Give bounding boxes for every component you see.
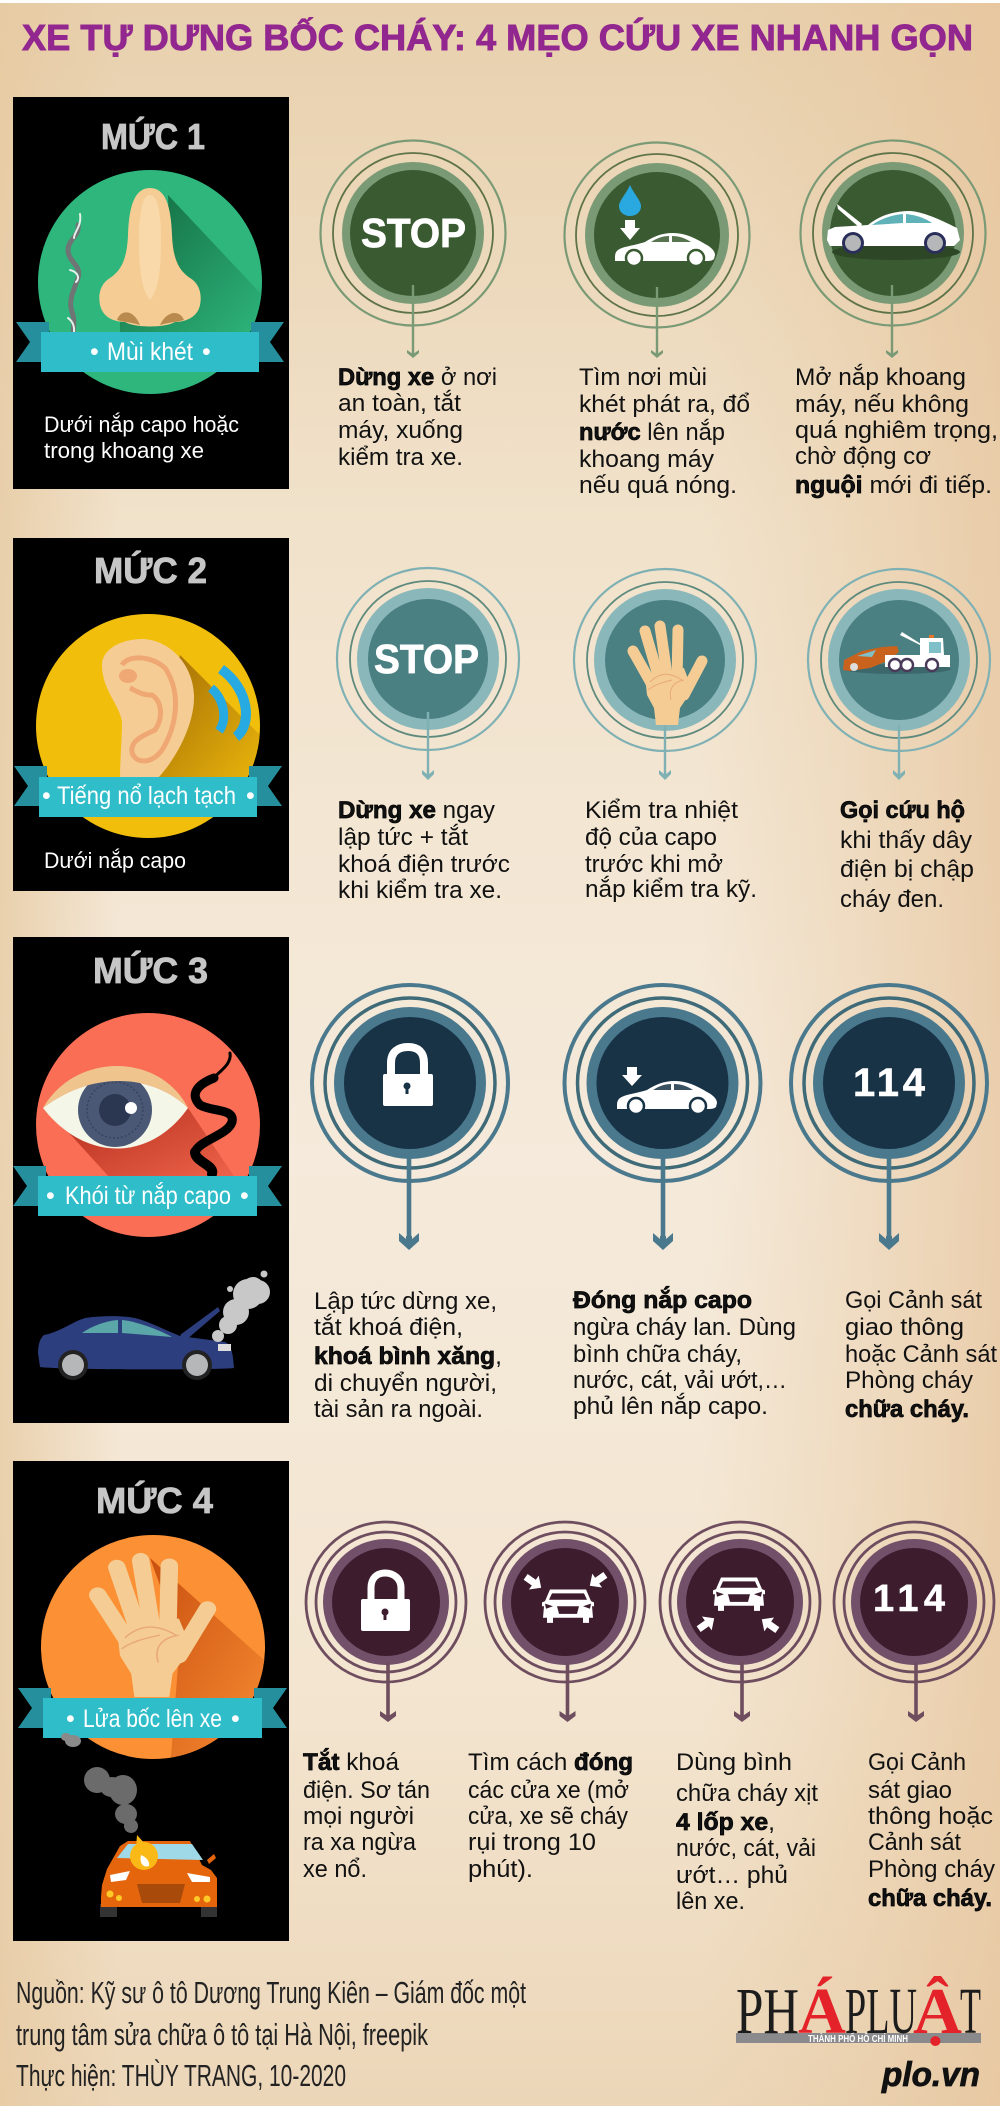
panel: level 3: [13, 937, 289, 1423]
step: L2 tow truck: [808, 569, 990, 780]
text: L4 step 4: thông hoặc: [868, 1803, 993, 1830]
arrow: [560, 1662, 576, 1722]
text: L4 step 4: Gọi Cảnh: [868, 1749, 966, 1776]
text: L1 step 2: Tìm nơi mùi: [579, 364, 707, 391]
text: L4 step 4: Cảnh sát: [868, 1829, 961, 1856]
text: L4 step 2: [468, 1749, 633, 1883]
text: L4 step 1: điện. Sơ tán: [303, 1777, 430, 1804]
text: L1 step 2: nếu quá nóng.: [579, 472, 737, 499]
heading: level 1: MỨC 1: [101, 115, 205, 157]
icon: car: [617, 1081, 717, 1114]
arrow: [422, 712, 434, 780]
text: L2 step 1: Dừng xe ngay: [338, 797, 495, 824]
icon: 114: 114: [853, 1061, 926, 1105]
text: L4 step 4: [868, 1749, 995, 1912]
step: L3 call 114: [791, 985, 987, 1250]
panel: level 2: [13, 538, 289, 891]
icon: car front with tyre arrows: [694, 1578, 782, 1637]
text: L2 step 3: điện bị chập: [840, 856, 974, 883]
text: L1 step 3: [795, 364, 998, 499]
arrow: [886, 285, 898, 358]
text: L1 step 1: an toàn, tắt: [338, 390, 461, 417]
arrow: [653, 1158, 673, 1250]
text: L3 step 3: Gọi Cảnh sát: [845, 1287, 982, 1314]
text: L1 step 2: khét phát ra, đổ: [579, 391, 750, 418]
icon: smoking blue car: [38, 1270, 270, 1380]
footer: source and credits: [16, 1975, 526, 2093]
text: L4 step 1: [303, 1748, 430, 1883]
text: L4 step 2: Tìm cách đóng: [468, 1749, 633, 1776]
text: L1 step 1: [338, 364, 497, 471]
text: L2 step 3: khi thấy dây: [840, 827, 972, 854]
step: L2 stop: [337, 568, 519, 780]
heading: level 2: MỨC 2: [94, 549, 207, 591]
text: L4 step 2: các cửa xe (mở: [468, 1777, 629, 1804]
arrow: [380, 1662, 396, 1722]
text: L4 step 3: 4 lốp xe,: [676, 1809, 775, 1836]
step: L1 stop: [320, 140, 506, 358]
arrow: [659, 725, 671, 780]
step: L3 close hood: [564, 985, 760, 1250]
orange circle: [41, 1535, 265, 1759]
step: L4 spray tyres: [660, 1522, 820, 1722]
text: L3 step 3: Phòng cháy: [845, 1367, 973, 1394]
text: L3 step 3: giao thông: [845, 1314, 964, 1341]
text: L4 step 1: Tắt khoá: [303, 1748, 400, 1776]
icon: ear: [102, 639, 260, 777]
text: L4 step 3: [676, 1749, 818, 1915]
step: L2 hand: [574, 569, 756, 780]
green circle: [38, 170, 262, 394]
ribbon: Khói từ nắp capo: Khói từ nắp capo: [65, 1181, 231, 1210]
text: L4 step 1: ra xa ngừa: [303, 1829, 417, 1856]
text: L4 step 1: mọi người: [303, 1803, 414, 1830]
text: L4 step 2: cửa, xe sẽ cháy: [468, 1803, 628, 1830]
text: L1 step 2: nước lên nắp: [579, 419, 725, 446]
arrow: [879, 1158, 899, 1250]
ribbon: Mùi khét: •: [90, 338, 99, 366]
step: L4 call 114: [834, 1522, 994, 1722]
text: L3 step 1: di chuyển người,: [314, 1370, 497, 1397]
text: L4 step 3: ướt… phủ: [676, 1862, 788, 1889]
icon: hand: [98, 1558, 275, 1770]
text: L1 step 1: Dừng xe ở nơi: [338, 364, 497, 391]
text: L3 step 1: Lập tức dừng xe,: [314, 1288, 497, 1315]
text: L4 step 2: rụi trong 10: [468, 1829, 596, 1856]
icon: lock: [361, 1573, 410, 1631]
text: L3 step 1: tài sản ra ngoài.: [314, 1396, 483, 1423]
icon: down arrow: [620, 220, 640, 240]
logo: Pháp Luật: [736, 1975, 981, 2094]
icon: nose: [99, 188, 262, 340]
text: L1 step 3: Mở nắp khoang: [795, 364, 966, 391]
logo: Pháp Luật: THÀNH PHỐ HỒ CHÍ MINH: [808, 2031, 908, 2045]
text: L2 step 2: trước khi mở: [585, 851, 723, 878]
text: L3 step 2: phủ lên nắp capo.: [573, 1393, 768, 1420]
icon: lock: [383, 1047, 433, 1106]
arrow: [651, 287, 663, 358]
title: XE TỰ DƯNG BỐC CHÁY: 4 MẸO CỨU XE NHANH GỌN: [22, 16, 973, 58]
panel text: level 1: Dưới nắp capo hoặc: [44, 412, 239, 437]
ribbon: Lửa bốc lên xe: Lửa bốc lên xe: [83, 1705, 222, 1733]
text: L1 step 3: quá nghiêm trọng,: [795, 417, 998, 444]
ribbon: Khói từ nắp capo: •: [46, 1182, 55, 1210]
text: L3 step 3: [845, 1287, 997, 1423]
text: L4 step 3: lên xe.: [676, 1888, 745, 1915]
ribbon: Lửa bốc lên xe: [18, 1688, 287, 1738]
text: L4 step 3: nước, cát, vải: [676, 1835, 816, 1862]
icon: water drop: [619, 185, 641, 216]
logo: Pháp Luật: T: [960, 1975, 981, 2048]
arrow: [908, 1662, 924, 1722]
heading: level 3: MỨC 3: [93, 949, 208, 991]
panel text: level 2: Dưới nắp capo: [44, 848, 186, 873]
arrow: [893, 725, 905, 780]
text: L3 step 1: [314, 1288, 502, 1423]
text: L2 step 1: lập tức + tắt: [338, 824, 468, 851]
logo: Pháp Luật: PH: [736, 1975, 799, 2048]
heading: level 4: MỨC 4: [96, 1479, 213, 1521]
icon: burning orange car: [84, 1767, 217, 1917]
icon: hand: [633, 626, 702, 725]
step: L1 water: [564, 142, 750, 358]
logo: Pháp Luật: PLU: [845, 1975, 917, 2048]
text: L1 step 3: nguội mới đi tiếp.: [795, 472, 992, 499]
ribbon: Mùi khét: •: [202, 338, 211, 366]
text: L1 step 3: chờ động cơ: [795, 443, 931, 470]
text: L2 step 1: [338, 797, 510, 904]
step: L4 lock: [306, 1522, 466, 1722]
ribbon: Mùi khét: Mùi khét: [107, 338, 193, 366]
text: L2 step 3: cháy đen.: [840, 886, 944, 913]
text: L1 step 1: máy, xuống: [338, 417, 463, 444]
icon: down arrow: [622, 1067, 642, 1086]
text: L2 step 3: Gọi cứu hộ: [840, 797, 965, 824]
text: L2 step 2: độ của capo: [585, 824, 717, 851]
arrow: [407, 285, 419, 358]
text: L3 step 3: hoặc Cảnh sát: [845, 1341, 997, 1368]
ribbon: Mùi khét: [16, 322, 284, 372]
icon: STOP: STOP: [374, 636, 479, 682]
text: L3 step 2: bình chữa cháy,: [573, 1341, 742, 1368]
text: L3 step 2: [573, 1286, 796, 1420]
text: L2 step 1: khoá điện trước: [338, 851, 510, 878]
icon: smell wisp: [68, 214, 80, 339]
icon: tow truck: [843, 632, 951, 674]
icon: STOP: STOP: [361, 210, 466, 256]
text: L2 step 2: [585, 797, 757, 903]
ribbon: Tiếng nổ lạch tạch: •: [42, 782, 51, 810]
text: L1 step 2: khoang máy: [579, 446, 714, 473]
text: L4 step 4: chữa cháy.: [868, 1885, 992, 1912]
text: L4 step 3: chữa cháy xịt: [676, 1780, 818, 1807]
text: L3 step 2: Đóng nắp capo: [573, 1286, 752, 1314]
footer: source and credits: trung tâm sửa chữa ô tô tại Hà Nội, freepik: [16, 2017, 428, 2052]
yellow circle: [36, 614, 260, 838]
step: L4 close doors: [485, 1522, 645, 1722]
icon: car: [615, 233, 715, 266]
text: L4 step 1: xe nổ.: [303, 1856, 367, 1883]
text: L4 step 2: phút).: [468, 1856, 533, 1883]
arrow: [399, 1158, 419, 1250]
panel: level 1: [13, 97, 289, 489]
text: L4 step 4: Phòng cháy: [868, 1856, 995, 1883]
icon: car with open hood: [827, 204, 960, 260]
ribbon: Khói từ nắp capo: [13, 1166, 282, 1216]
text: L4 step 3: Dùng bình: [676, 1749, 792, 1776]
text: L3 step 1: tắt khoá điện,: [314, 1314, 463, 1341]
text: L4 step 4: sát giao: [868, 1777, 952, 1804]
text: L2 step 2: nắp kiểm tra kỹ.: [585, 876, 757, 903]
icon: car front with arrows: [521, 1568, 610, 1623]
ribbon: Lửa bốc lên xe: •: [66, 1705, 75, 1733]
panel: level 4: [13, 1461, 289, 1941]
logo: Pháp Luật: Á: [798, 1975, 846, 2048]
step: L1 open hood: [800, 140, 986, 358]
text: L2 step 3: [840, 797, 974, 913]
text: L3 step 2: nước, cát, vải ướt,…: [573, 1367, 787, 1394]
coral circle: [36, 1013, 260, 1237]
text: L2 step 2: Kiểm tra nhiệt: [585, 797, 738, 824]
ribbon: Lửa bốc lên xe: •: [231, 1705, 240, 1733]
panel text: level 1: [44, 412, 239, 463]
text: L2 step 1: khi kiểm tra xe.: [338, 877, 502, 904]
icon: sound waves: [211, 669, 246, 737]
step: L3 lock: [312, 985, 508, 1250]
arrow: [734, 1662, 750, 1722]
ribbon: Tiếng nổ lạch tạch: [14, 766, 282, 817]
text: L3 step 3: chữa cháy.: [845, 1396, 969, 1423]
ribbon: Khói từ nắp capo: •: [240, 1182, 249, 1210]
panel text: level 1: trong khoang xe: [44, 438, 204, 463]
text: L3 step 2: ngừa cháy lan. Dùng: [573, 1314, 796, 1341]
text: L1 step 2: [579, 364, 750, 499]
footer: source and credits: Nguồn: Kỹ sư ô tô Dương Trung Kiên – Giám đốc một: [16, 1975, 526, 2010]
logo: Pháp Luật: plo.vn: [881, 2056, 980, 2094]
icon: black smoke: [195, 1053, 232, 1180]
ribbon: Tiếng nổ lạch tạch: •: [246, 782, 255, 810]
text: L1 step 1: kiểm tra xe.: [338, 444, 463, 471]
footer: source and credits: Thực hiện: THÙY TRANG, 10-2020: [16, 2058, 346, 2093]
text: L1 step 3: máy, nếu không: [795, 391, 969, 418]
logo: Pháp Luật: Ậ: [913, 1975, 962, 2048]
text: L3 step 1: khoá bình xăng,: [314, 1343, 502, 1370]
icon: eye: [43, 1066, 234, 1176]
icon: small smoke: [61, 1733, 81, 1747]
icon: 114: 114: [873, 1578, 945, 1620]
ribbon: Tiếng nổ lạch tạch: Tiếng nổ lạch tạch: [57, 782, 236, 810]
